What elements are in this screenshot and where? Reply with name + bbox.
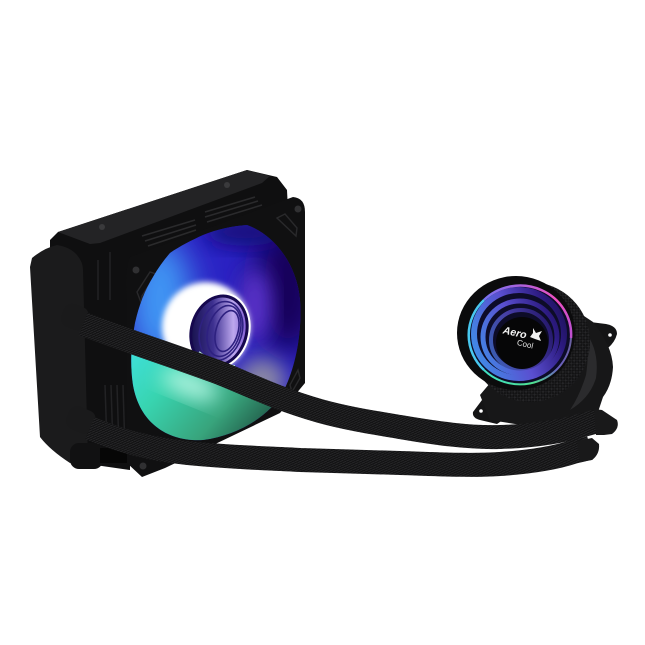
logo text: Cool: Cool [516,338,534,351]
grey lower right [238,358,286,402]
frame corner screws [132,206,302,470]
fan opening [131,225,300,440]
upper braided tube [83,324,598,437]
pump body [480,300,613,428]
radiator top plate [58,170,270,244]
radiator fins [98,252,125,452]
violet light near hub [239,269,271,341]
dark purple shade [254,215,322,355]
rim arcs [484,286,571,338]
pump tube fittings [577,409,618,462]
ear hole [608,333,612,337]
blue highlight [128,238,192,362]
logo icon: leaf [530,328,542,341]
pump RGB ring [469,286,571,384]
radiator bottom fitting [70,443,128,469]
lower braided tube [90,428,590,465]
radiator side tank [30,245,88,463]
logo text: Aero: Aero [501,324,528,342]
pump mounting ear: top right [590,322,617,352]
pump carbon shell [470,282,590,402]
ear hole [479,409,483,413]
radiator body [50,170,288,470]
white glow ring [162,282,250,372]
infinity mirror hub [189,293,251,366]
tube fittings [59,301,98,436]
product illustration: liquid cooler [30,170,618,477]
pump face bezel [457,276,575,390]
fan frame [126,197,305,477]
pump body band [570,330,597,410]
pump cap with logo [496,317,548,369]
pump mounting ear: bottom left [473,400,510,424]
radiator side slots [142,197,262,246]
teal lower blade area [131,354,272,440]
frame corner latches [137,214,300,392]
